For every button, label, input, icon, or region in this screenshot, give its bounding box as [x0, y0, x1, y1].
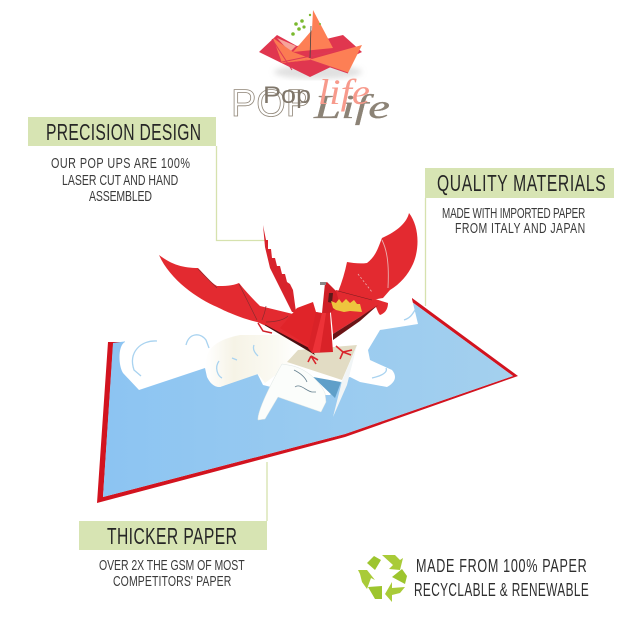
panel: quality materials — [425, 168, 614, 236]
heading band: PRECISION DESIGN — [46, 120, 201, 146]
feet — [308, 346, 352, 364]
logo wordmark: Life — [313, 89, 390, 126]
panel: precision design — [28, 117, 216, 204]
logo wordmark: life — [318, 72, 370, 112]
recycling text: RECYCLABLE & RENEWABLE — [414, 581, 589, 601]
description: COMPETITORS' PAPER — [113, 572, 231, 589]
recycling badge — [358, 555, 589, 602]
description — [442, 205, 585, 236]
logo wordmark: POP — [231, 83, 311, 125]
card base — [97, 298, 518, 503]
connector lines — [216, 146, 426, 521]
description: MADE WITH IMPORTED PAPER — [442, 205, 585, 222]
head and horn — [322, 282, 340, 313]
description: LASER CUT AND HAND — [62, 171, 178, 188]
panel: thicker paper — [79, 521, 267, 589]
heading band: QUALITY MATERIALS — [437, 171, 606, 197]
description: ASSEMBLED — [89, 187, 152, 204]
description — [99, 556, 245, 589]
tail — [263, 225, 296, 312]
inner box — [287, 345, 357, 380]
wing shadow — [265, 325, 314, 354]
description: FROM ITALY AND JAPAN — [455, 219, 585, 236]
left wing — [159, 255, 320, 352]
description: OUR POP UPS ARE 100% — [51, 154, 190, 171]
jaw and claw — [330, 290, 388, 334]
icon: recycle symbol — [358, 555, 407, 602]
clouds — [119, 290, 418, 420]
dragon — [159, 213, 418, 364]
description — [51, 154, 190, 204]
tree leaves — [291, 14, 321, 36]
logo wordmark: Pop — [263, 82, 311, 109]
heading band — [79, 521, 267, 550]
heading band: THICKER PAPER — [107, 524, 237, 550]
recycling text — [414, 557, 589, 601]
logo: Pop Life — [231, 10, 390, 126]
pop-up card illustration — [97, 213, 518, 503]
recycling text: MADE FROM 100% PAPER — [416, 557, 587, 577]
body — [280, 302, 322, 348]
right wing — [338, 213, 418, 300]
description: OVER 2X THE GSM OF MOST — [99, 556, 245, 573]
logo wordmark — [231, 72, 390, 126]
fire — [331, 299, 362, 312]
lower cloud — [258, 364, 326, 420]
logo boat icon — [259, 10, 362, 79]
